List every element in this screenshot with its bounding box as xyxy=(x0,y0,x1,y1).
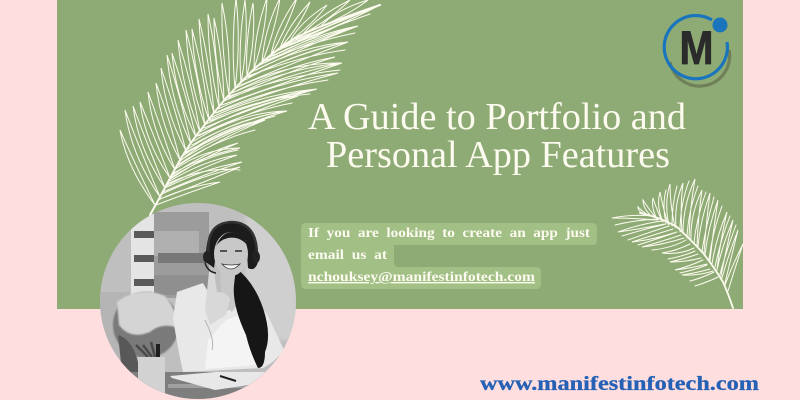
desk xyxy=(130,372,266,399)
title xyxy=(308,96,686,176)
pencil cup xyxy=(136,342,165,393)
logo blue dot xyxy=(712,18,728,32)
small palm leaf xyxy=(612,179,743,308)
left wall shadow xyxy=(100,292,130,372)
website url: www.manifestinfotech.com xyxy=(480,373,759,395)
neck xyxy=(220,272,236,312)
globe xyxy=(113,292,179,372)
woman xyxy=(173,221,284,372)
contact line 2: email us at xyxy=(308,248,387,263)
circular photo xyxy=(100,203,298,400)
face xyxy=(214,232,248,276)
green panel xyxy=(57,0,743,309)
logo shadow ring xyxy=(670,50,730,86)
raised hand xyxy=(205,272,230,325)
wood panel xyxy=(154,212,209,298)
company logo xyxy=(664,16,730,86)
large palm leaf xyxy=(120,0,380,215)
highlight boxes xyxy=(301,223,597,289)
title: Personal App Features xyxy=(326,134,670,176)
hair top xyxy=(206,221,258,269)
contact text block xyxy=(301,223,597,289)
contact line 1: If you are looking to create an app just xyxy=(308,226,590,241)
headset xyxy=(208,222,257,258)
long hair xyxy=(234,268,268,368)
papers on desk xyxy=(170,372,265,390)
logo blue ring xyxy=(664,16,727,79)
logo letter: M xyxy=(680,21,714,74)
photo background wall xyxy=(100,203,296,399)
white column with dark bars xyxy=(131,212,154,297)
contact email: nchouksey@manifestinfotech.com xyxy=(308,270,535,285)
right window xyxy=(245,215,297,340)
title: A Guide to Portfolio and xyxy=(308,96,686,138)
shirt xyxy=(173,283,284,372)
